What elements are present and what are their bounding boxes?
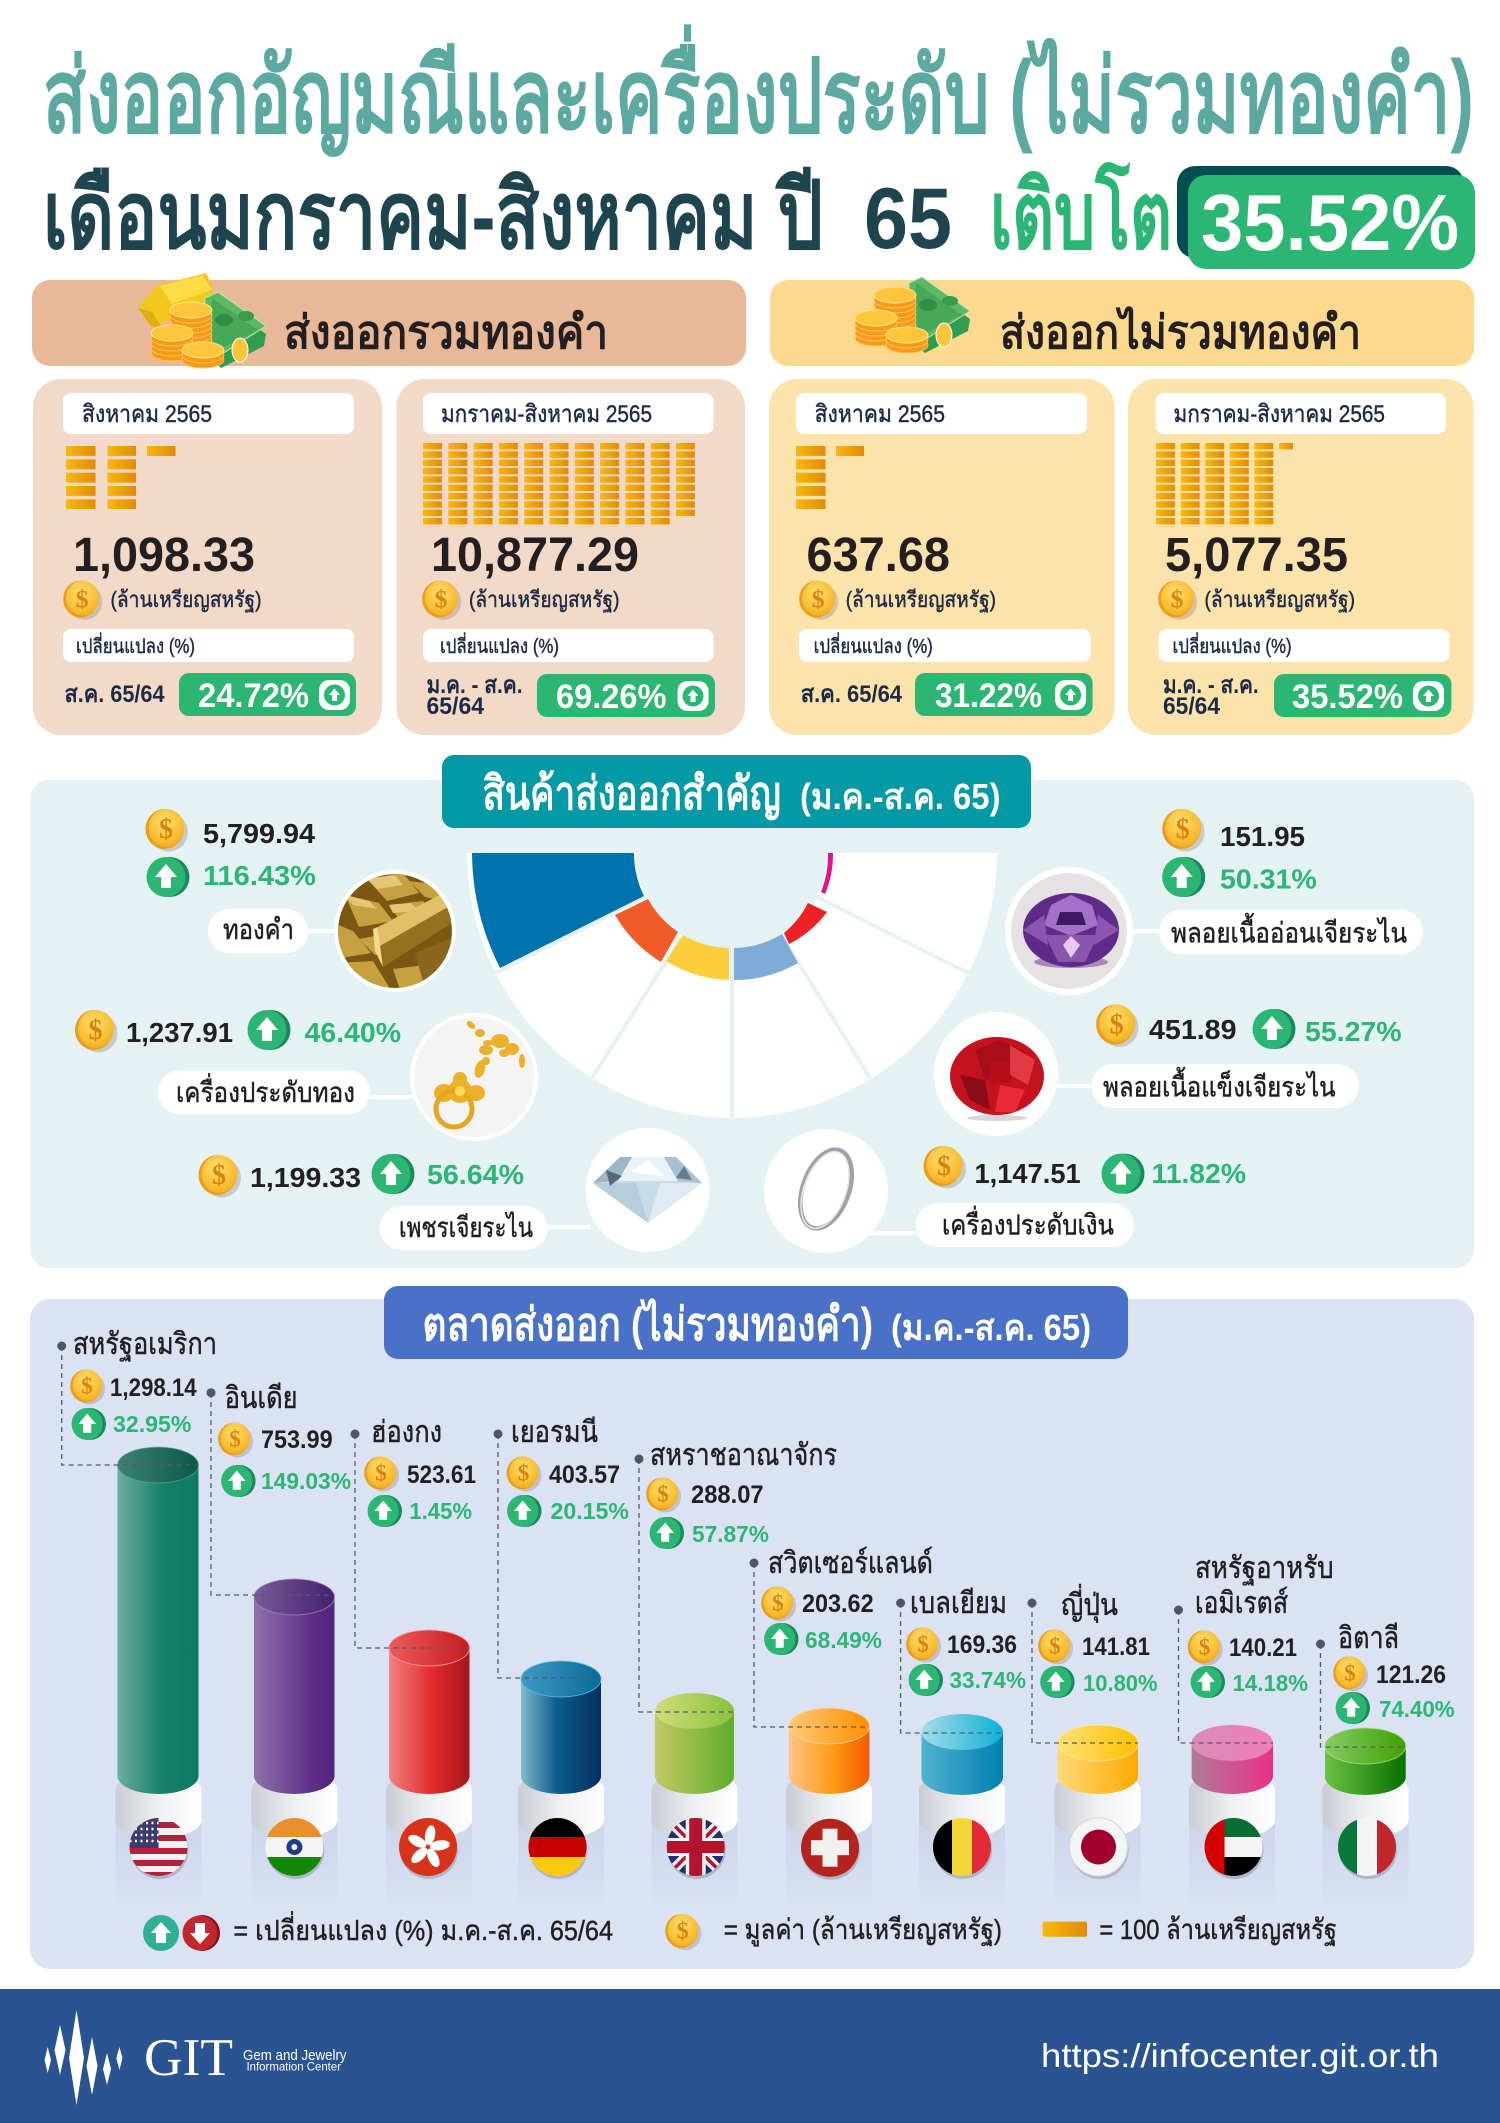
coin [146, 809, 188, 852]
title line 2: เดือนมกราคม-สิงหาคม ปี [43, 163, 823, 268]
market: Germany: 403.57 [549, 1461, 620, 1489]
item: hard colored stones: 451.89 [1149, 1014, 1236, 1045]
market: UAE: $ [1199, 1634, 1210, 1659]
card: Jan-Aug 2565 incl gold: ม.ค. - ส.ค. [426, 672, 522, 699]
photo: diamond [586, 1128, 710, 1252]
legend: coin [665, 1914, 701, 1950]
flag: UAE [1204, 1818, 1264, 1879]
coin: $ [1176, 814, 1190, 845]
market: Belgium: 33.74% [950, 1667, 1026, 1693]
market: Belgium: เบลเยียม [910, 1587, 1007, 1620]
legend: = 100 ล้านเหรียญสหรัฐ [1099, 1914, 1337, 1946]
market: Germany: เยอรมนี [511, 1416, 598, 1449]
item: gold [146, 809, 456, 993]
market: UAE [1174, 1552, 1334, 1743]
market: United Kingdom [634, 1439, 837, 1712]
item: hard colored stones: พลอยเนื้อแข็งเจียระไน [1103, 1066, 1336, 1102]
market: Germany [494, 1416, 629, 1678]
market: United States: 1,298.14 [110, 1374, 197, 1402]
up arrow [1102, 1154, 1144, 1194]
item: diamonds: เพชรเจียระไน [399, 1212, 533, 1243]
market: Switzerland: $ [772, 1590, 784, 1615]
item: soft colored stones: 151.95 [1220, 821, 1305, 852]
flag: Germany [528, 1818, 588, 1879]
card: Jan-Aug 2565 incl gold: 10,877.29 [431, 529, 639, 582]
card: Jan-Aug 2565 incl gold: 65/64 [426, 693, 485, 720]
cylinder: Hong Kong [389, 1630, 470, 1794]
item: silver jewelry: เครื่องประดับเงิน [942, 1206, 1114, 1240]
market: United States: 32.95% [113, 1411, 192, 1437]
legend [143, 1911, 1337, 1951]
coin [1096, 1004, 1139, 1047]
flag: Hong Kong [399, 1818, 458, 1879]
market: Belgium [896, 1587, 1026, 1733]
market: Germany: 20.15% [550, 1498, 629, 1524]
card: Aug 2565 excl gold: (ล้านเหรียญสหรัฐ) [846, 587, 996, 613]
item: gold: 5,799.94 [203, 818, 315, 849]
coin [799, 581, 838, 620]
card: Aug 2565 excl gold: 31.22% [935, 677, 1042, 715]
market: Italy [1316, 1622, 1455, 1747]
photo: gold jewelry [412, 1015, 536, 1139]
market: Japan: 141.81 [1082, 1633, 1150, 1661]
panel: key export products [30, 780, 1474, 1268]
photo: purple gem [1008, 870, 1130, 992]
logo text: GIT [144, 2029, 233, 2087]
card: Aug 2565 excl gold: สิงหาคม 2565 [815, 401, 945, 428]
card: Jan-Aug 2565 excl gold: มกราคม-สิงหาคม 2565 [1174, 401, 1385, 428]
legend: = เปลี่ยนแปลง (%) ม.ค.-ส.ค. 65/64 [233, 1911, 613, 1946]
card: Jan-Aug 2565 incl gold: เปลี่ยนแปลง (%) [440, 632, 559, 658]
panel: export markets [30, 1299, 1474, 1969]
market: Belgium: 169.36 [947, 1631, 1017, 1659]
cylinder: Italy [1325, 1728, 1406, 1795]
footer [0, 1989, 1500, 2123]
footer: Information Center [246, 2060, 341, 2074]
coin: $ [1110, 1010, 1124, 1040]
flag: USA [130, 1818, 188, 1879]
coin [198, 1155, 241, 1198]
coin: $ [88, 1015, 102, 1046]
cylinder: Japan [1058, 1725, 1138, 1794]
flag: Italy [1338, 1818, 1397, 1879]
center hole [636, 853, 828, 949]
market: United States: สหรัฐอเมริกา [73, 1328, 217, 1362]
market: United Kingdom: $ [657, 1481, 669, 1506]
flag: Japan [1070, 1818, 1128, 1879]
coin: $ [435, 584, 448, 613]
chart: export market cylinders [116, 1447, 1408, 1912]
icon: coins and money [855, 277, 970, 353]
market: Switzerland: 68.49% [805, 1627, 882, 1653]
coin [1162, 809, 1205, 852]
item: hard colored stones: 55.27% [1305, 1016, 1402, 1047]
chart: semicircle of product share [467, 853, 997, 1118]
card: Jan-Aug 2565 excl gold [1128, 379, 1474, 735]
market: India: $ [229, 1426, 241, 1451]
market: Hong Kong: ฮ่องกง [371, 1416, 442, 1449]
headline growth badge: 35.52% [1201, 178, 1459, 267]
market: United Kingdom: สหราชอาณาจักร [650, 1439, 837, 1472]
card: Aug 2565 incl gold: (ล้านเหรียญสหรัฐ) [110, 587, 262, 613]
market: Italy: 74.40% [1379, 1696, 1455, 1722]
heading: key export products: (ม.ค.-ส.ค. 65) [800, 776, 1000, 817]
up arrow [1162, 857, 1205, 897]
heading: export markets [384, 1286, 1128, 1359]
market: Switzerland: สวิตเซอร์แลนด์ [768, 1546, 933, 1580]
market: United Kingdom: 288.07 [691, 1481, 764, 1509]
flag: India [265, 1818, 324, 1879]
card: Jan-Aug 2565 incl gold: (ล้านเหรียญสหรัฐ) [469, 587, 620, 613]
market: India [206, 1382, 351, 1595]
photo: gold bars [333, 870, 456, 993]
market: Belgium: $ [917, 1631, 929, 1656]
item: gold jewelry: 46.40% [305, 1017, 401, 1048]
legend: coin: $ [677, 1919, 689, 1945]
photo: red gem [934, 1012, 1058, 1136]
card: Aug 2565 incl gold: 1,098.33 [73, 529, 255, 582]
card: Jan-Aug 2565 excl gold: เปลี่ยนแปลง (%) [1172, 632, 1292, 658]
cylinder: UAE [1192, 1725, 1273, 1794]
sector: silver jewelry [734, 934, 798, 980]
title year: 65 [864, 171, 952, 267]
market: India: อินเดีย [225, 1382, 298, 1415]
card: Aug 2565 incl gold [33, 379, 382, 735]
heading: export markets: ตลาดส่งออก (ไม่รวมทองคำ) [422, 1298, 873, 1350]
coin [1158, 581, 1197, 620]
card: Aug 2565 excl gold: ส.ค. 65/64 [801, 681, 903, 708]
market: Hong Kong [350, 1416, 476, 1648]
cylinder: Switzerland [789, 1708, 869, 1794]
sector: hard colored stones [784, 903, 827, 944]
heading: key export products [442, 755, 1031, 828]
card: Jan-Aug 2565 incl gold: 69.26% [556, 678, 666, 716]
value bars [66, 446, 176, 509]
market: Italy: อิตาลี [1338, 1622, 1399, 1655]
card: Aug 2565 excl gold: 637.68 [806, 529, 950, 582]
sector: gold jewelry [615, 899, 678, 962]
cylinder: India [254, 1579, 334, 1794]
legend: change icons [143, 1915, 220, 1951]
sector: gold [472, 853, 644, 968]
market: Italy: $ [1344, 1660, 1356, 1685]
item: diamonds: 1,199.33 [250, 1162, 361, 1193]
cylinder: Belgium [922, 1714, 1003, 1795]
header text: ส่งออกไม่รวมทองคำ [1000, 306, 1361, 358]
title growth word: เติบโต [990, 161, 1172, 268]
coin [924, 1146, 966, 1188]
item: silver jewelry: 1,147.51 [974, 1158, 1081, 1189]
item: gold: 116.43% [203, 860, 316, 891]
market: Germany: $ [518, 1460, 529, 1485]
coin: $ [1171, 584, 1184, 613]
card: Jan-Aug 2565 incl gold [396, 379, 745, 735]
header: excluding gold [770, 277, 1474, 366]
coin [63, 581, 102, 620]
item: hard colored stones [934, 1004, 1402, 1136]
market: UAE: สหรัฐอาหรับ [1195, 1552, 1334, 1586]
item: gold: ทองคำ [223, 914, 294, 945]
card: Jan-Aug 2565 excl gold: 5,077.35 [1165, 529, 1348, 582]
coin: $ [212, 1160, 226, 1191]
card: Aug 2565 incl gold: เปลี่ยนแปลง (%) [76, 632, 195, 658]
card: Aug 2565 excl gold [769, 379, 1115, 735]
header: including gold [32, 273, 746, 368]
sector: diamonds [666, 935, 729, 980]
coin: $ [159, 814, 173, 845]
flag: Switzerland [801, 1819, 860, 1880]
card: Jan-Aug 2565 excl gold: 35.52% [1292, 678, 1403, 716]
item: soft colored stones: 50.31% [1220, 864, 1317, 895]
cylinder: USA [118, 1447, 198, 1794]
value bars [423, 443, 695, 526]
market: UAE: 140.21 [1229, 1634, 1297, 1662]
header text: ส่งออกรวมทองคำ [284, 306, 608, 358]
coin [75, 1010, 118, 1052]
market: UAE: เอมิเรตส์ [1195, 1586, 1288, 1620]
market: United Kingdom: 57.87% [692, 1521, 769, 1547]
value bars [796, 446, 864, 509]
item: gold jewelry: เครื่องประดับทอง [176, 1073, 355, 1108]
market: Switzerland: 203.62 [802, 1590, 874, 1618]
market: Hong Kong: 1.45% [409, 1498, 472, 1524]
market: India: 753.99 [261, 1426, 333, 1454]
pedestals [116, 1772, 1408, 1912]
market: Hong Kong: $ [375, 1460, 387, 1485]
item: diamonds [198, 1128, 710, 1252]
coin [422, 581, 461, 620]
card: Jan-Aug 2565 incl gold: มกราคม-สิงหาคม 2565 [441, 401, 652, 428]
flag: United Kingdom [666, 1817, 726, 1879]
coin: $ [937, 1151, 951, 1182]
coin: $ [812, 584, 825, 613]
market: Switzerland [750, 1546, 933, 1727]
up arrow [1252, 1009, 1296, 1049]
photo: silver ring [764, 1129, 888, 1253]
icon: gold bars and money [138, 273, 266, 368]
flag: Belgium [933, 1818, 992, 1879]
up arrow [146, 857, 190, 897]
heading: key export products: สินค้าส่งออกสำคัญ [482, 767, 781, 820]
item: gold jewelry: 1,237.91 [126, 1017, 233, 1048]
market: United States [57, 1328, 217, 1465]
market: Japan: 10.80% [1083, 1670, 1158, 1696]
item: soft colored stones: พลอยเนื้ออ่อนเจียระไน [1171, 913, 1407, 949]
cylinder: United Kingdom [655, 1693, 734, 1794]
market: Japan: ญี่ปุ่น [1061, 1584, 1118, 1624]
logo: GIT diamonds [44, 2010, 122, 2105]
market: United States: $ [81, 1373, 93, 1398]
up arrow [372, 1154, 414, 1194]
legend: = มูลค่า (ล้านเหรียญสหรัฐ) [724, 1914, 1002, 1947]
heading: export markets: (ม.ค.-ส.ค. 65) [891, 1307, 1091, 1348]
item: silver jewelry: 11.82% [1152, 1158, 1246, 1189]
footer: Gem and Jewelry [243, 2047, 347, 2064]
sector dividers [496, 894, 968, 1118]
card: Aug 2565 incl gold: สิงหาคม 2565 [82, 401, 212, 428]
value bars [1156, 443, 1293, 526]
item: gold jewelry [75, 1010, 536, 1139]
card: Aug 2565 excl gold: เปลี่ยนแปลง (%) [814, 632, 933, 658]
market: Japan: $ [1049, 1633, 1061, 1658]
website url: https://infocenter.git.or.th [1041, 2037, 1439, 2074]
item: soft colored stones [1008, 809, 1423, 992]
legend: bar [1043, 1922, 1087, 1937]
market: Italy: 121.26 [1376, 1661, 1446, 1689]
card: Aug 2565 incl gold: 24.72% [198, 677, 309, 715]
item: diamonds: 56.64% [427, 1159, 524, 1190]
market: Hong Kong: 523.61 [407, 1461, 476, 1489]
card: Aug 2565 incl gold: ส.ค. 65/64 [64, 681, 165, 708]
cylinder: Germany [521, 1661, 601, 1794]
card: Jan-Aug 2565 excl gold: 65/64 [1163, 693, 1221, 720]
card: Jan-Aug 2565 excl gold: ม.ค. - ส.ค. [1163, 672, 1259, 699]
item: silver jewelry [764, 1129, 1246, 1253]
coin: $ [76, 584, 89, 613]
sector: soft colored stones [821, 853, 833, 894]
market: India: 149.03% [261, 1468, 351, 1494]
market: UAE: 14.18% [1232, 1670, 1308, 1696]
up arrow [248, 1010, 290, 1050]
card: Jan-Aug 2565 excl gold: (ล้านเหรียญสหรัฐ) [1204, 587, 1355, 613]
market: Japan [1028, 1584, 1158, 1743]
